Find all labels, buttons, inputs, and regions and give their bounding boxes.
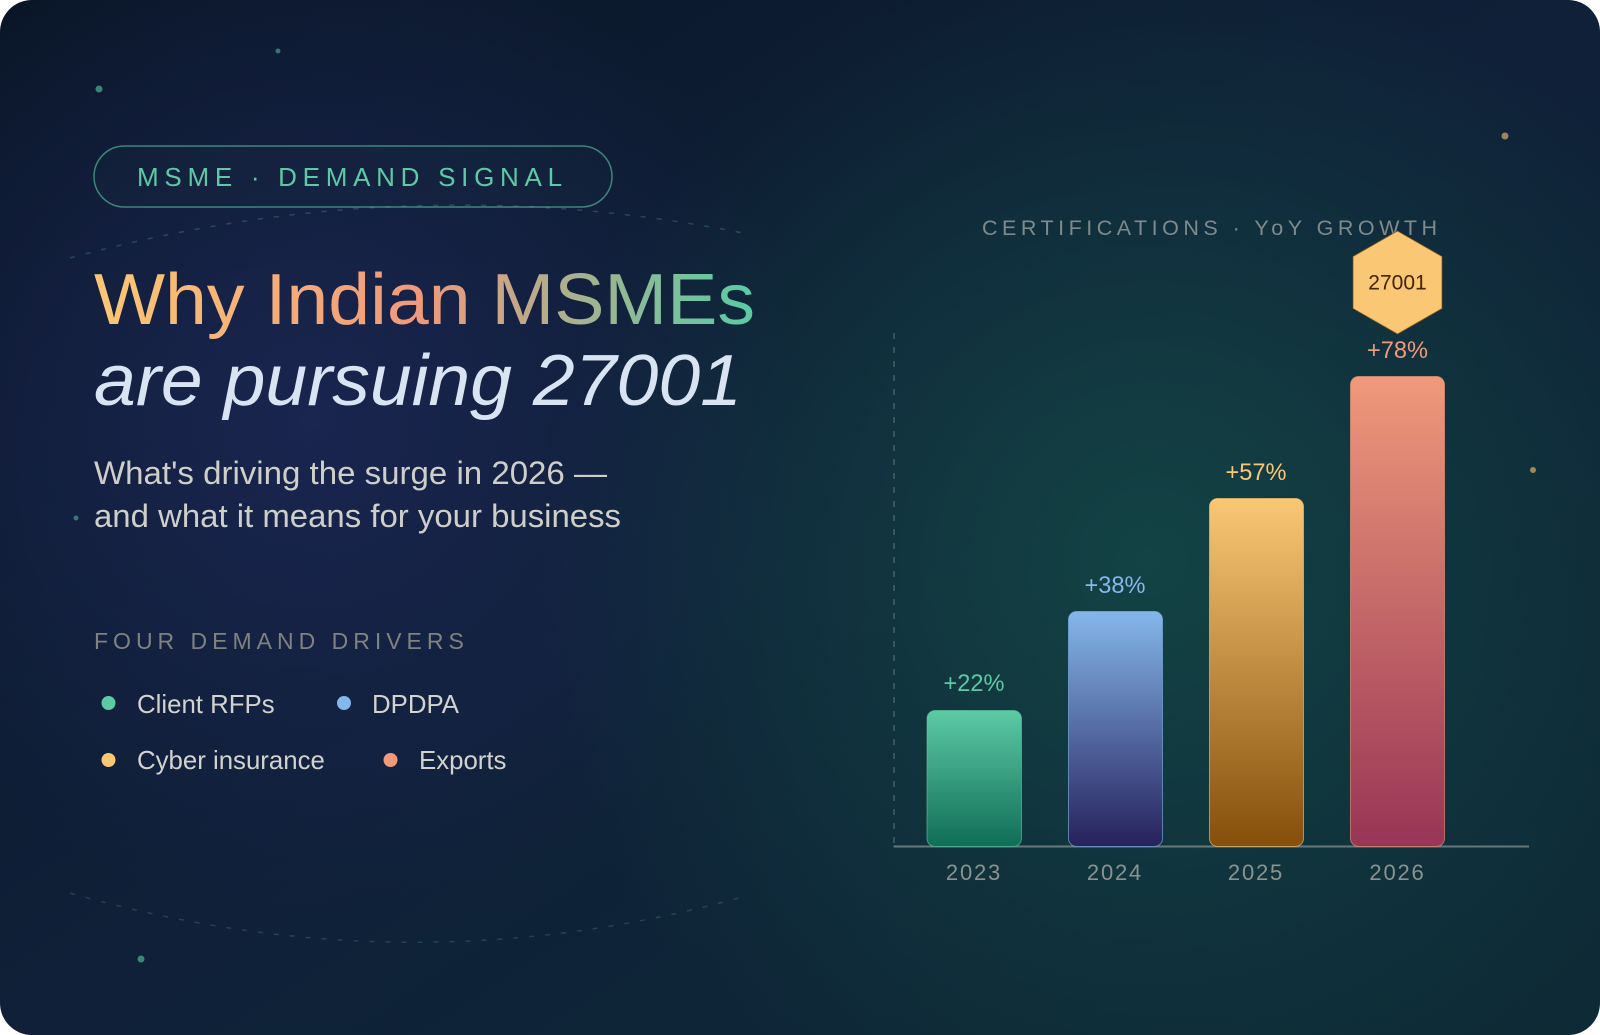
legend: demand drivers bbox=[102, 691, 506, 775]
bar 2025: 2025 bbox=[1228, 860, 1284, 885]
subtitle: What's driving the surge in 2026 — bbox=[94, 455, 607, 491]
bar 2024 bbox=[1068, 573, 1162, 885]
chart axes bbox=[894, 333, 1529, 846]
decorative top arc bbox=[70, 205, 748, 258]
legend item: cyber insurance: Cyber insurance bbox=[137, 747, 325, 775]
bar 2023 bbox=[927, 671, 1022, 885]
bar 2026: +78% bbox=[1367, 338, 1428, 364]
heading: four demand drivers: FOUR DEMAND DRIVERS bbox=[94, 628, 469, 654]
subtitle bbox=[94, 455, 621, 534]
bar chart bbox=[894, 333, 1529, 885]
bar 2023: +22% bbox=[943, 671, 1005, 697]
title bbox=[94, 260, 755, 421]
badge: 27001 hexagon: 27001 bbox=[1368, 272, 1427, 294]
badge: 27001 hexagon bbox=[1353, 231, 1442, 334]
bar 2024: 2024 bbox=[1087, 860, 1143, 885]
subtitle: and what it means for your business bbox=[94, 498, 621, 534]
bar 2024: +38% bbox=[1084, 573, 1146, 599]
legend item: exports: Exports bbox=[419, 747, 506, 775]
bar 2025 bbox=[1210, 460, 1304, 885]
bar 2026 bbox=[1350, 338, 1444, 885]
bar 2023: 2023 bbox=[946, 860, 1002, 885]
title: are pursuing 27001 bbox=[94, 341, 742, 421]
bar 2026: 2026 bbox=[1369, 860, 1426, 885]
chart title: CERTIFICATIONS · YoY GROWTH bbox=[982, 216, 1442, 240]
legend item: DPDPA: DPDPA bbox=[372, 691, 460, 719]
title: Why Indian MSMEs bbox=[94, 260, 755, 340]
decorative bottom arc bbox=[70, 893, 746, 942]
bar 2025: +57% bbox=[1225, 460, 1287, 486]
legend item: client RFPs: Client RFPs bbox=[137, 691, 275, 719]
badge: MSME demand signal: MSME · DEMAND SIGNAL bbox=[137, 162, 568, 192]
badge: MSME demand signal bbox=[94, 146, 612, 207]
